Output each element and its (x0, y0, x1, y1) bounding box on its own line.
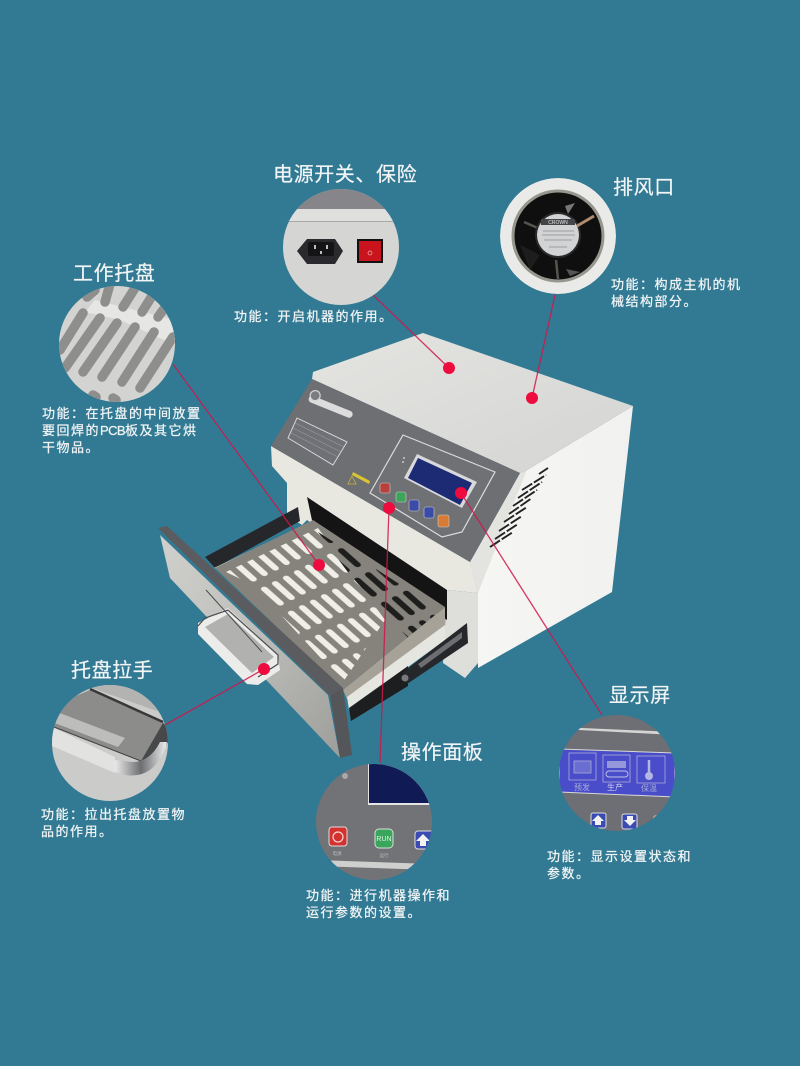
title: control panel: 操作面板 (401, 741, 483, 764)
title: exhaust: 排风口 (613, 176, 675, 199)
button down (424, 507, 434, 518)
opening (307, 497, 447, 620)
handle recess (205, 614, 274, 673)
button power (380, 483, 390, 493)
chart grid (291, 423, 344, 457)
circle: panel detail (316, 764, 439, 880)
status LEDs (402, 457, 405, 463)
slide rail outer (403, 623, 468, 684)
slide rail inner (349, 666, 408, 721)
circle: display detail: 生产 (607, 782, 623, 792)
circle: handle detail (52, 685, 168, 801)
drawer front face (160, 535, 340, 758)
tray slots dark (318, 532, 440, 640)
drawer top edge (158, 526, 343, 696)
description: control panel: 功能：进行机器操作和 (306, 888, 451, 903)
handle plate (198, 608, 280, 685)
title: tray handle: 托盘拉手 (71, 659, 153, 682)
vent slots (490, 468, 548, 547)
circle: panel detail: 运行 (380, 852, 389, 859)
circle: display detail: 预发 (574, 782, 590, 792)
leader lines (165, 294, 602, 763)
description: exhaust: 械结构部分。 (611, 294, 698, 309)
button set (438, 515, 449, 527)
description: handle: 功能：拉出托盘放置物 (41, 807, 186, 822)
machine top cover (312, 333, 633, 473)
title: power switch: 电源开关、保险 (273, 163, 417, 186)
circle: display detail (559, 715, 675, 831)
tray slots bright (226, 528, 385, 682)
handle (198, 590, 280, 685)
panel: tray handle (41, 659, 186, 839)
LCD screen (404, 454, 477, 508)
circle: fan detail (500, 178, 616, 294)
temperature curve panel (288, 418, 347, 465)
rounded front edge (470, 470, 527, 593)
circle: power detail (283, 189, 399, 305)
white strip (347, 625, 445, 710)
description: exhaust: 功能：构成主机的机 (611, 277, 742, 292)
oven machine (158, 333, 633, 758)
rail highlight (418, 632, 462, 668)
description: handle: 品的作用。 (41, 824, 114, 839)
control outline (370, 435, 495, 537)
handle shadow (206, 590, 262, 652)
panel: display (547, 685, 692, 881)
white left tray rail (214, 527, 303, 571)
warning label (352, 472, 370, 484)
circle: tray detail (59, 284, 175, 402)
circle: display detail: 保温 (641, 783, 657, 793)
drawer front dark end (330, 688, 352, 758)
tray (215, 520, 445, 690)
description: display: 参数。 (547, 866, 591, 881)
machine right side (470, 406, 633, 668)
description: power: 功能：开启机器的作用。 (234, 309, 394, 324)
circle: fan detail: CROWN (548, 220, 568, 226)
button up (409, 500, 419, 511)
left drawer rail (205, 507, 300, 568)
circle: panel detail: 电源 (332, 850, 342, 857)
brand logo (308, 389, 356, 419)
LCD glass (408, 458, 472, 505)
lower right block (443, 590, 478, 678)
description: display: 功能：显示设置状态和 (547, 849, 692, 864)
rail screw (402, 674, 408, 682)
description: work tray: 干物品。 (42, 440, 100, 455)
title: work tray: 工作托盘 (73, 262, 155, 285)
panel: power switch and fuse (234, 163, 417, 324)
button run (396, 492, 406, 502)
marker dots (258, 362, 538, 675)
description: control panel: 运行参数的设置。 (306, 905, 422, 920)
circle: panel detail: RUN (376, 836, 392, 843)
panel: work tray (42, 262, 202, 455)
tray side bar (343, 607, 445, 699)
description: work tray: 要回焊的PCB板及其它烘 (42, 423, 197, 438)
warning triangle (348, 476, 356, 484)
panel: control panel (306, 741, 483, 920)
control fascia (271, 379, 520, 562)
description: work tray: 功能：在托盘的中间放置 (42, 406, 202, 421)
panel: exhaust fan (500, 176, 742, 309)
title: display: 显示屏 (609, 685, 671, 707)
front frame (271, 446, 478, 620)
handle bar (198, 610, 278, 677)
